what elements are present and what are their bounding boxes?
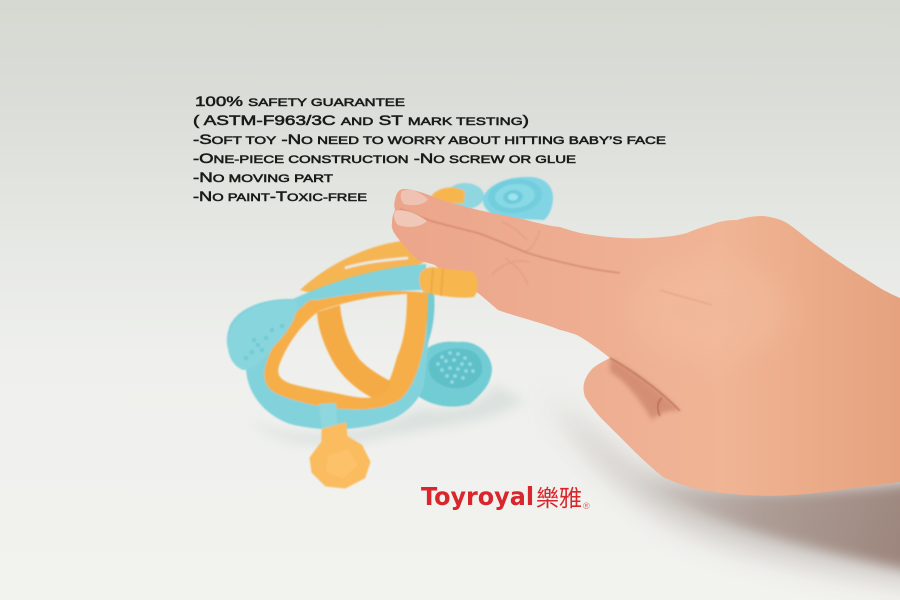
teal flower block bbox=[415, 342, 492, 407]
orange ridged handle tip bbox=[419, 267, 478, 298]
toy cast shadow bbox=[250, 385, 525, 445]
ringed blue disc bbox=[483, 176, 553, 220]
logo: Toyroyal: Toyroyal bbox=[421, 482, 534, 511]
line: one-piece: -O NE-PIECE CONSTRUCTION -N O SCREW OR GLUE bbox=[193, 150, 577, 166]
line: standards: ( ASTM-F963/3C AND ST MARK TESTING ) bbox=[193, 112, 529, 128]
blue outer ring bbox=[227, 264, 428, 429]
toy: back parts bbox=[300, 176, 553, 407]
line: no paint: -N O PAINT -T OXIC-FREE bbox=[193, 188, 368, 204]
blue arm top bbox=[293, 264, 426, 300]
finger separation bbox=[400, 209, 620, 273]
blue back stem bbox=[414, 290, 435, 350]
orange back arcs bbox=[300, 241, 424, 295]
logo: Toyroyal: ® bbox=[583, 501, 590, 511]
line: soft toy: -S OFT TOY -N O NEED TO WORRY ABOUT HITTING BABY’S FACE bbox=[193, 131, 667, 147]
line: no moving part: -N O MOVING PART bbox=[193, 169, 333, 185]
logo: Toyroyal: 樂雅 bbox=[536, 485, 582, 511]
blue textured paddle bbox=[228, 300, 297, 370]
back blue disc bbox=[446, 183, 484, 209]
knuckle creases bbox=[492, 222, 712, 305]
orange crossing band bbox=[317, 305, 392, 398]
orange back piece bbox=[432, 187, 465, 204]
thumb crease bbox=[610, 358, 680, 420]
hand cast shadow bbox=[545, 395, 900, 590]
safety text block bbox=[193, 93, 667, 204]
orange inner ring bbox=[264, 291, 428, 410]
toy: front ring bbox=[227, 264, 478, 487]
fingernails bbox=[401, 190, 428, 205]
hand bbox=[392, 189, 900, 496]
bottom stem and faceted ball bbox=[311, 403, 369, 487]
line: safety guarantee: 100% SAFETY GUARANTEE bbox=[195, 93, 406, 109]
hand highlight bbox=[630, 260, 790, 360]
